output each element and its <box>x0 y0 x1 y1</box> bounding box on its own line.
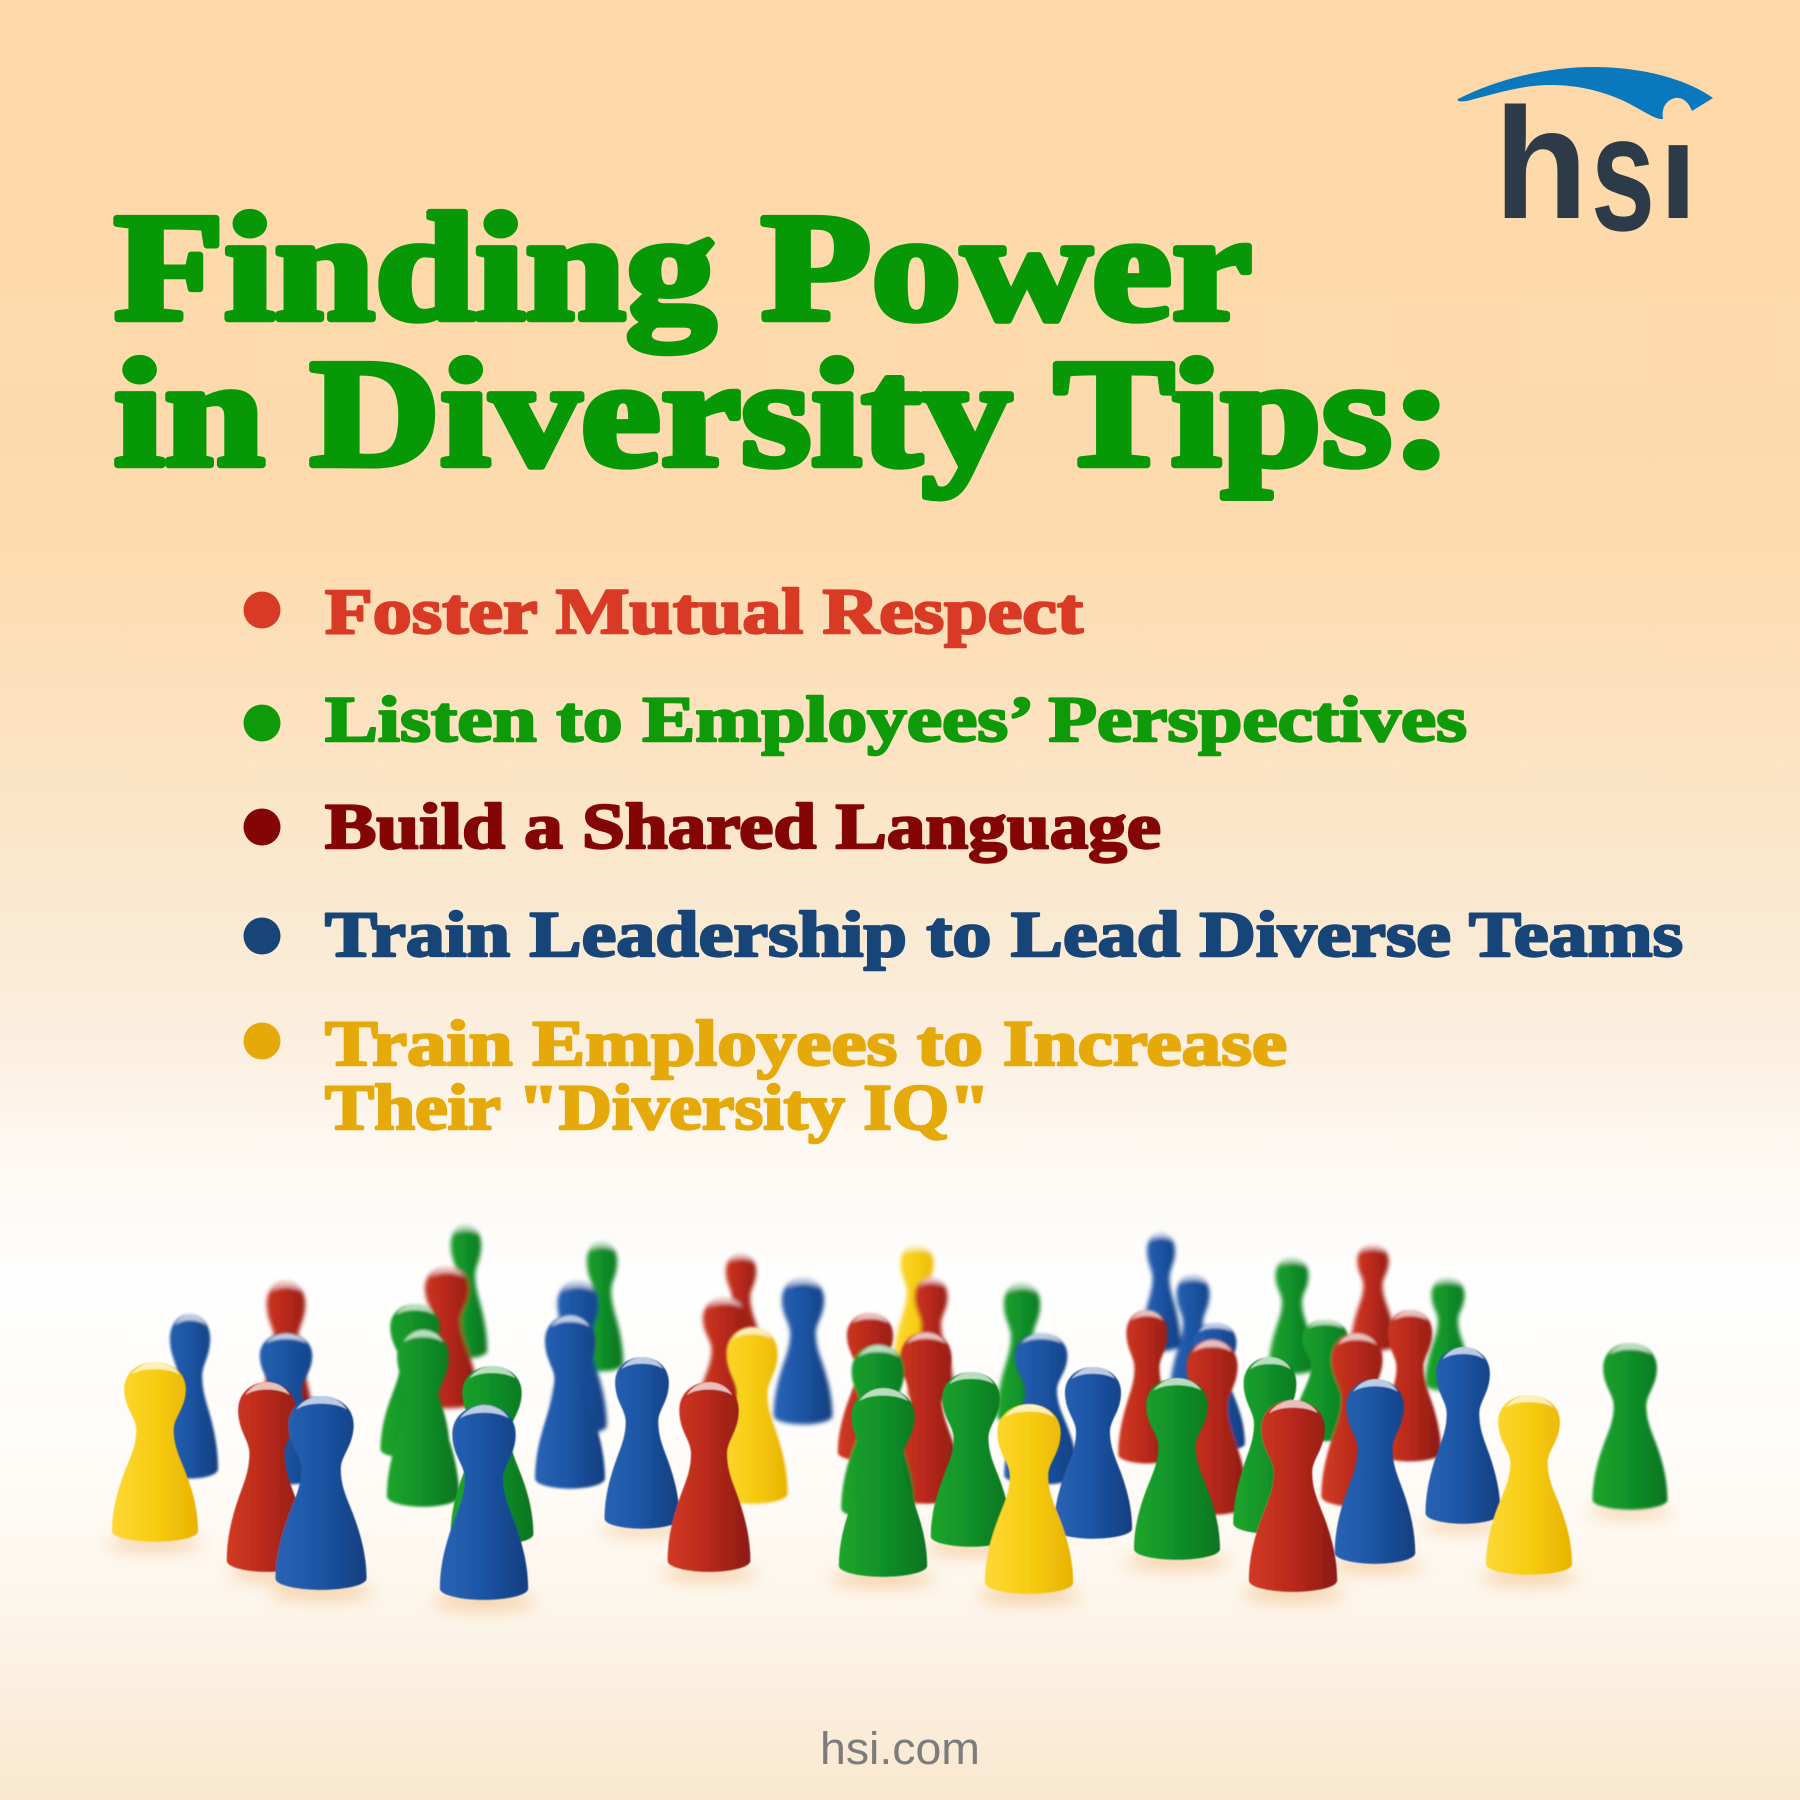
pawn: green <box>451 1366 533 1545</box>
tip 4: Train Leadership to Lead Diverse Teams <box>325 899 1683 971</box>
pawn: red <box>1379 1310 1441 1462</box>
pawn: blue <box>162 1314 218 1479</box>
pawn: green <box>445 1225 487 1358</box>
tip 5: Their "Diversity IQ" <box>325 1072 990 1144</box>
title line 1: Finding Power <box>114 183 1252 353</box>
pawn: green <box>581 1242 623 1371</box>
pawn: red <box>890 1332 962 1504</box>
pawn: blue <box>1054 1367 1132 1539</box>
pawn: green <box>931 1372 1011 1547</box>
pawn: yellow <box>985 1404 1073 1594</box>
logo: hsi <box>1458 67 1713 265</box>
title <box>114 183 1452 499</box>
pawn: red <box>1321 1333 1393 1507</box>
pawn: green <box>1233 1357 1307 1534</box>
pawn: red <box>908 1278 954 1401</box>
tip 1: Foster Mutual Respect <box>325 576 1083 648</box>
pawn: red <box>1351 1245 1395 1351</box>
pawn: yellow <box>894 1245 940 1368</box>
pawn: green <box>380 1304 450 1459</box>
pawn: red <box>227 1382 307 1572</box>
pawn: red <box>720 1254 762 1368</box>
pawn: green <box>1425 1278 1471 1391</box>
pawn: red <box>838 1313 902 1461</box>
logo wordmark: s <box>1591 81 1655 265</box>
pawn: red <box>259 1281 313 1435</box>
pawn: green <box>1269 1258 1315 1374</box>
pawn: green <box>841 1345 915 1519</box>
pawn: green <box>839 1388 927 1577</box>
pawn: blue <box>605 1357 679 1529</box>
pawn: blue <box>1004 1333 1078 1484</box>
pawn: green <box>1134 1378 1220 1560</box>
pawn: blue <box>535 1315 605 1489</box>
pawn: blue <box>249 1333 323 1484</box>
tips list <box>244 576 1683 1144</box>
pawn: blue <box>774 1278 832 1424</box>
pawn: red <box>668 1382 750 1572</box>
photo: middle pawns <box>162 1304 1667 1519</box>
tip 5 <box>244 1008 1287 1144</box>
photo: far pawns <box>259 1225 1471 1435</box>
pawn: green <box>387 1330 459 1507</box>
pawn: red <box>1249 1400 1337 1592</box>
pawn: yellow <box>1486 1395 1572 1575</box>
pawn: yellow <box>112 1362 198 1542</box>
logo wordmark: i <box>1659 94 1697 248</box>
pawn: blue <box>1141 1233 1181 1351</box>
pawn shadows <box>107 1506 1672 1610</box>
pawn: blue <box>440 1405 528 1600</box>
tip 3: Build a Shared Language <box>325 791 1161 863</box>
logo wordmark: h <box>1494 76 1588 252</box>
pawn: green <box>997 1283 1047 1424</box>
pawn: blue <box>1335 1379 1415 1564</box>
pawn: red <box>416 1267 478 1408</box>
title line 2: in Diversity Tips: <box>114 329 1452 499</box>
pawn: red <box>694 1298 756 1434</box>
tip 5: Train Employees to Increase <box>325 1008 1287 1080</box>
pawn: blue <box>275 1396 367 1590</box>
tip 2: Listen to Employees’ Perspectives <box>325 684 1467 756</box>
logo arc <box>1458 67 1713 119</box>
pawn: blue <box>1170 1275 1216 1401</box>
pawn: red <box>1176 1340 1248 1515</box>
pawn: blue <box>1426 1347 1500 1524</box>
pawn: green <box>1293 1320 1357 1441</box>
pawn: yellow <box>716 1327 788 1504</box>
pawn: blue <box>1185 1323 1245 1451</box>
pawn: blue <box>549 1281 607 1435</box>
photo: front pawns <box>112 1347 1572 1600</box>
footer url: hsi.com <box>820 1723 980 1774</box>
pawn: red <box>1118 1310 1176 1464</box>
pawn: green <box>1593 1343 1667 1510</box>
